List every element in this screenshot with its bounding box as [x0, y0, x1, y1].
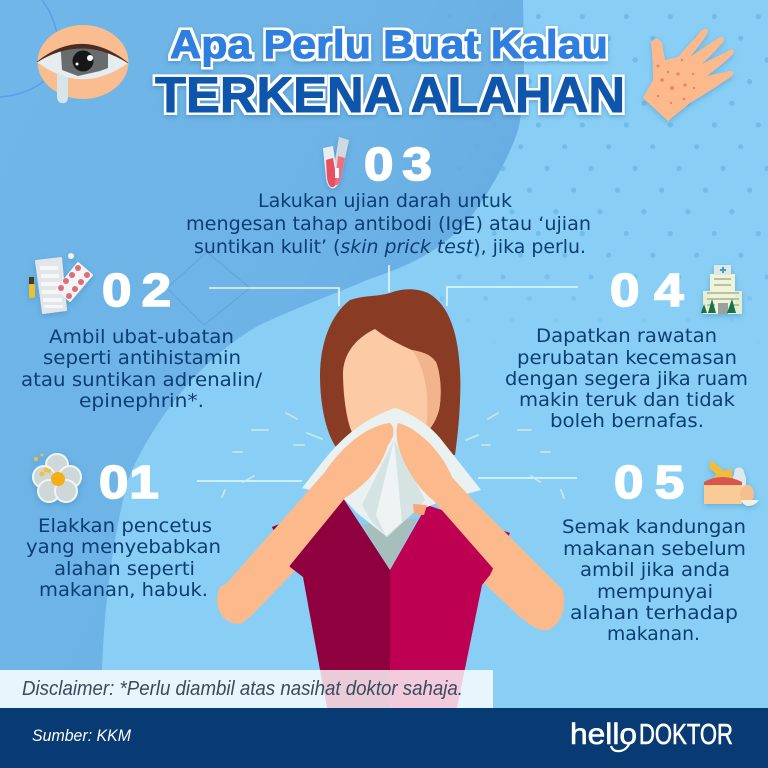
- disclaimer: [0, 670, 493, 708]
- text: step 04: [505, 325, 748, 432]
- text: step 01: Elakkan pencetus: [38, 515, 212, 537]
- tissue: [302, 408, 481, 537]
- text: step 05: ambil jika anda: [580, 559, 730, 581]
- step 05: 05: [614, 456, 684, 508]
- sneeze spray lines: [222, 413, 564, 498]
- step 03: 03: [364, 138, 432, 190]
- text: step 02: seperti antihistamin: [43, 347, 241, 369]
- hair: [320, 289, 460, 455]
- icon: blood test tubes: [323, 137, 349, 188]
- icon: hospital: [701, 265, 742, 314]
- text: step 03: suntikan kulit’ (skin prick test), jika perlu.: [194, 236, 586, 258]
- title: TERKENA ALAHAN: [155, 67, 625, 123]
- icon: food: [704, 460, 759, 506]
- shirt left: [272, 498, 390, 708]
- text: step 02: [21, 326, 263, 412]
- logo: hello: [570, 718, 637, 751]
- text: step 03: mengesan tahap antibodi (IgE) atau ‘ujian: [186, 213, 591, 235]
- text: step 01: alahan seperti: [54, 558, 195, 580]
- footer: [0, 708, 768, 768]
- icon: hand with rash: [643, 28, 734, 121]
- text: step 01: makanan, habuk.: [39, 579, 208, 601]
- text: step 05: alahan terhadap: [570, 602, 738, 624]
- text: step 01: [26, 515, 221, 601]
- text: step 05: mempunyai: [597, 581, 713, 603]
- text: step 05: makanan sebelum: [563, 538, 746, 560]
- text: step 04: dengan segera jika ruam: [505, 368, 748, 390]
- step 04: 04: [610, 264, 684, 316]
- text: step 04: makin teruk dan tidak: [519, 389, 735, 411]
- logo: DOKTOR: [639, 719, 733, 751]
- right forearm: [396, 423, 564, 630]
- face shadow: [412, 350, 441, 433]
- step 02: 02: [102, 264, 171, 316]
- title: Apa Perlu Buat Kalau: [170, 23, 608, 67]
- step 04: [505, 264, 748, 432]
- shirt right: [390, 505, 510, 708]
- face: [343, 329, 441, 449]
- woman blowing nose: [217, 289, 564, 708]
- text: step 01: yang menyebabkan: [26, 536, 221, 558]
- source: Sumber: KKM: [32, 726, 132, 745]
- text: step 05: [562, 516, 746, 645]
- text: step 02: epinephrin*.: [79, 390, 204, 412]
- step 05: [562, 456, 759, 645]
- logo: [570, 718, 733, 751]
- text: step 04: Dapatkan rawatan: [536, 325, 717, 347]
- step 03: [186, 137, 591, 258]
- neck opening: [362, 518, 418, 570]
- left forearm: [217, 423, 394, 624]
- text: step 04: perubatan kecemasan: [517, 347, 737, 369]
- connector lines: [197, 265, 578, 481]
- finger detail: [413, 504, 427, 515]
- text: step 02: Ambil ubat-ubatan: [49, 326, 234, 348]
- step 01: [26, 454, 221, 601]
- icon: crying eye: [37, 25, 128, 103]
- upper arms: [217, 545, 564, 630]
- text: step 03: [186, 190, 591, 258]
- title: [155, 23, 625, 123]
- icon: pills: [29, 253, 92, 313]
- step 02: [21, 253, 263, 412]
- icon: flower and pollen: [33, 454, 81, 502]
- text: step 02: atau suntikan adrenalin/: [21, 369, 263, 391]
- step 01: 01: [99, 456, 159, 508]
- text: step 03: Lakukan ujian darah untuk: [258, 190, 512, 212]
- text: step 04: boleh bernafas.: [550, 410, 704, 432]
- text: step 05: makanan.: [607, 623, 700, 645]
- text: step 05: Semak kandungan: [562, 516, 746, 538]
- disclaimer: Disclaimer: *Perlu diambil atas nasihat doktor sahaja.: [22, 678, 463, 700]
